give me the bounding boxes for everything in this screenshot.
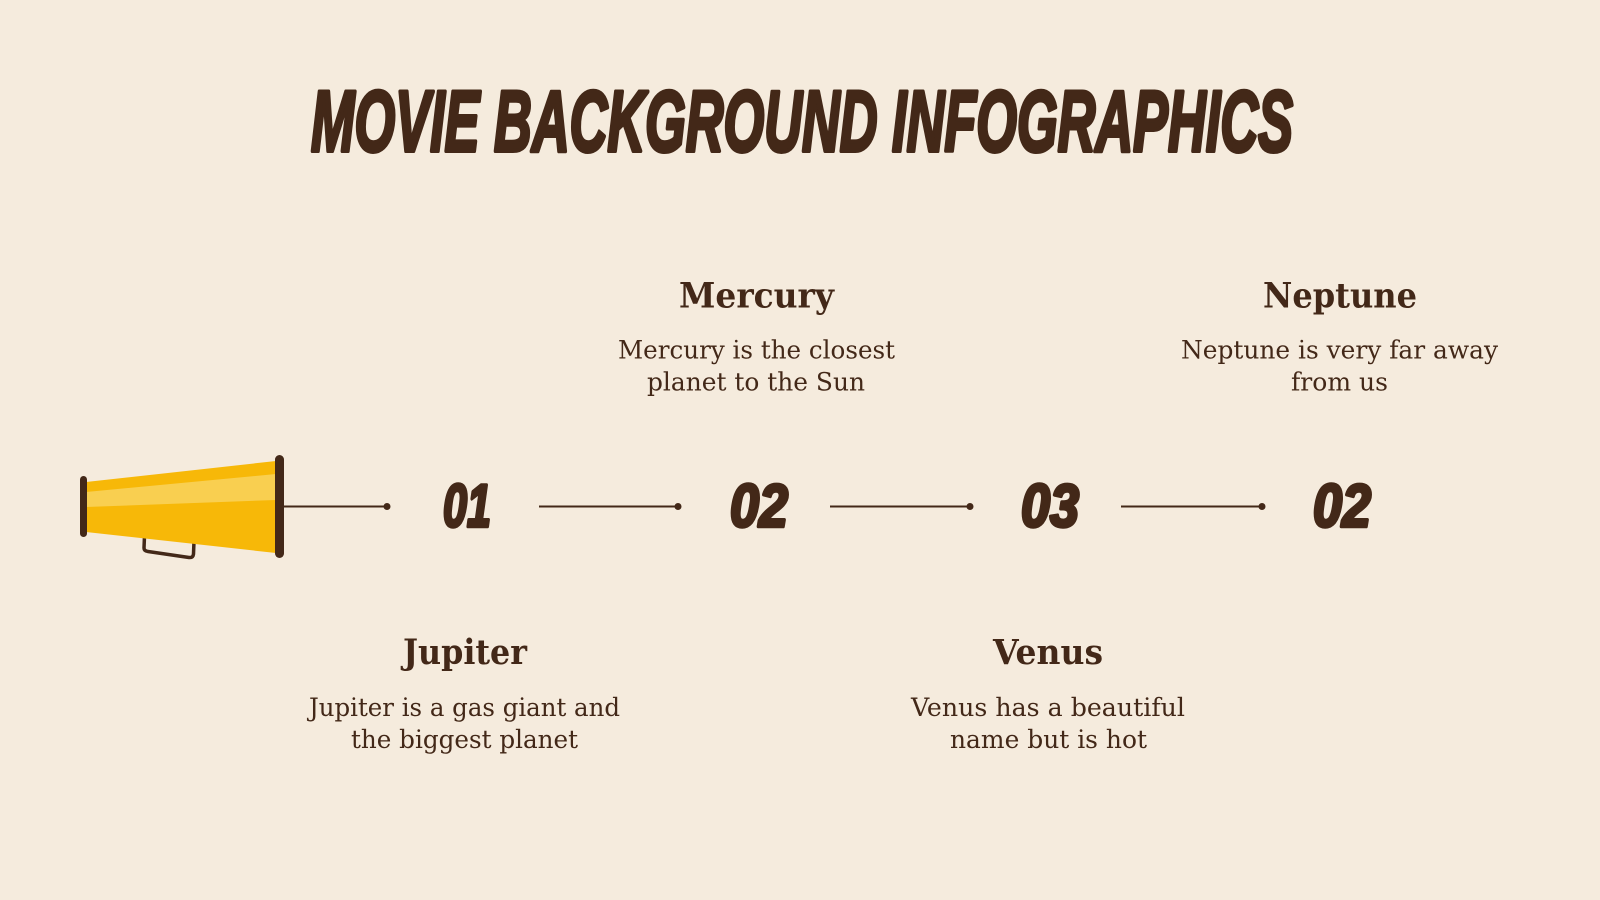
megaphone handle (144, 536, 194, 558)
description: Neptune: Neptune is very far away (1181, 336, 1499, 366)
number 03: 03 (1021, 472, 1079, 540)
arrow: 01 to 02 (539, 503, 682, 510)
number 02 (last): 02 (1313, 472, 1371, 540)
arrow: 03 to 02 (1121, 503, 1266, 510)
text block: Venus (910, 633, 1185, 755)
description: Venus: name but is hot (950, 725, 1148, 755)
heading: Neptune: Neptune (1263, 276, 1417, 316)
description: Mercury (618, 336, 896, 398)
description: Venus: Venus has a beautiful (910, 693, 1185, 723)
text block: Mercury (618, 276, 896, 398)
description: Mercury: Mercury is the closest (618, 336, 896, 366)
number 01: 01 (443, 472, 491, 540)
arrow: megaphone to 01 (284, 503, 390, 510)
megaphone large rim (275, 455, 284, 558)
text block: Jupiter (306, 633, 620, 755)
heading: Venus: Venus (992, 633, 1103, 673)
description: Neptune (1181, 336, 1499, 398)
description: Jupiter (306, 693, 620, 755)
megaphone cone (86, 461, 276, 553)
arrow: 02 to 03 (830, 503, 974, 510)
description: Venus (910, 693, 1185, 755)
description: Mercury: planet to the Sun (647, 368, 865, 398)
icon: megaphone (80, 455, 284, 558)
heading: Jupiter: Jupiter (400, 633, 528, 673)
description: Neptune: from us (1291, 368, 1388, 398)
description: Jupiter: the biggest planet (351, 725, 579, 755)
megaphone highlight (86, 474, 276, 507)
text block: Neptune (1181, 276, 1499, 398)
description: Jupiter: Jupiter is a gas giant and (306, 693, 620, 723)
megaphone small rim (80, 476, 87, 537)
number 02: 02 (730, 472, 788, 540)
heading: Mercury: Mercury (679, 276, 835, 316)
